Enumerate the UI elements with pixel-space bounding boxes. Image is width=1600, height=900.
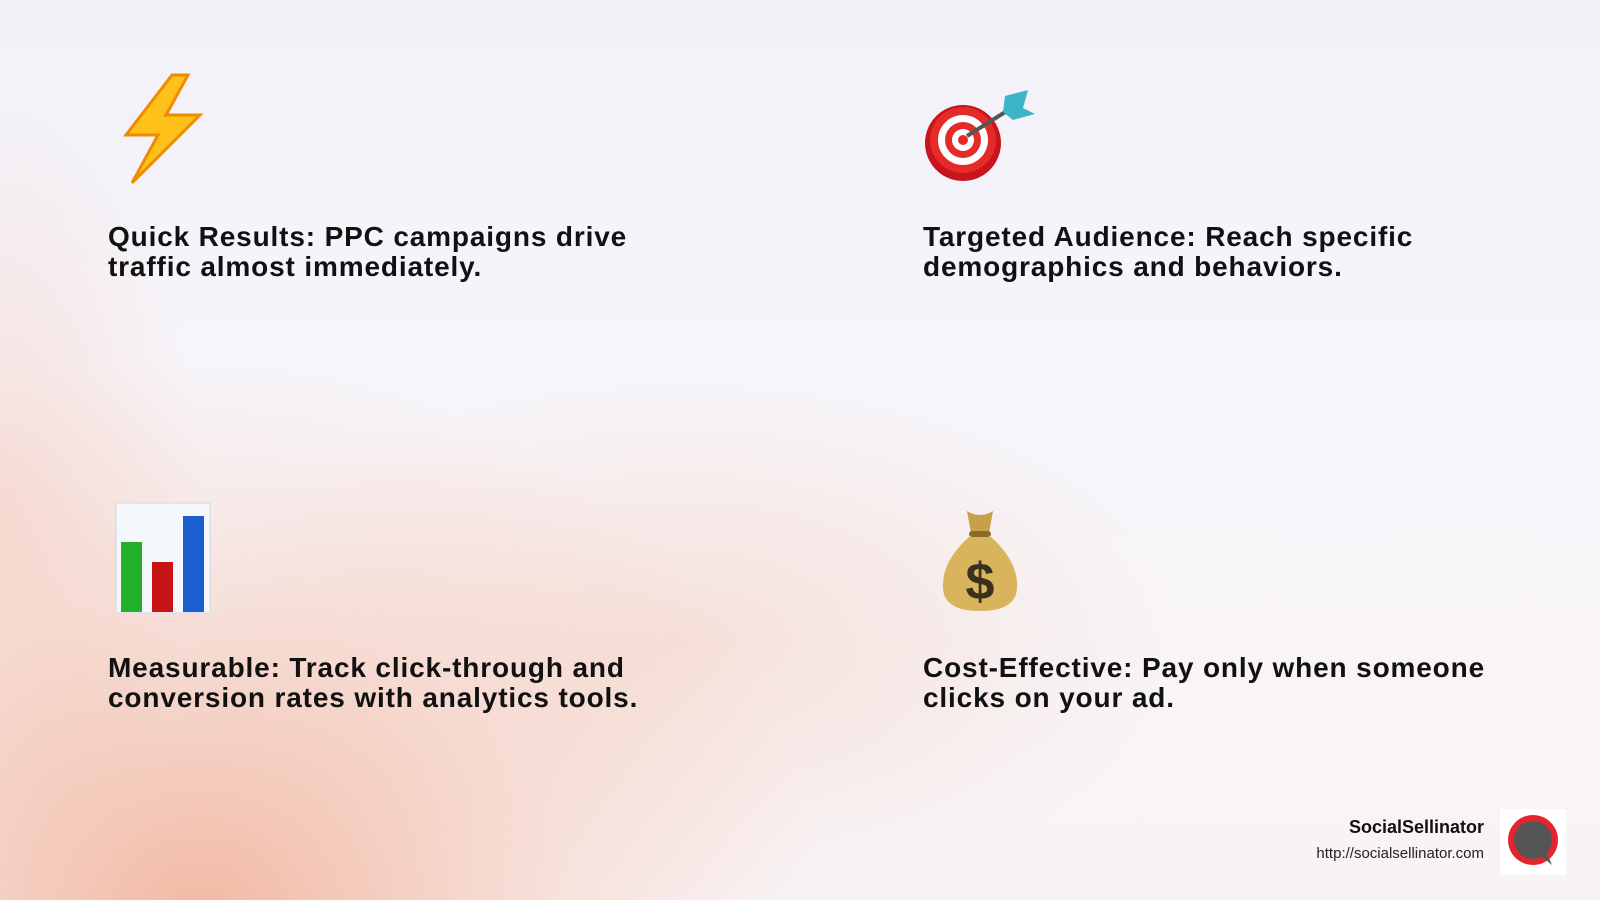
brand block — [1316, 809, 1566, 875]
text: targeted audience: demographics and behaviors. — [923, 251, 1343, 282]
text: measurable: Measurable: Track click-through and — [108, 652, 625, 683]
text: quick results — [108, 221, 627, 282]
icon: bar chart — [116, 502, 210, 614]
brand url: http://socialsellinator.com — [1316, 845, 1484, 862]
text: targeted audience — [923, 221, 1413, 282]
text: measurable: conversion rates with analytics tools. — [108, 682, 638, 713]
text: quick results: Quick Results: PPC campaigns drive — [108, 221, 627, 252]
logo — [1500, 809, 1566, 875]
icon: money bag — [942, 511, 1018, 611]
text: cost-effective — [923, 652, 1485, 713]
icon: lightning — [123, 74, 204, 184]
text: cost-effective: Cost-Effective: Pay only when someone — [923, 652, 1485, 683]
brand name: SocialSellinator — [1349, 817, 1484, 837]
icon: money bag: $ — [966, 553, 995, 611]
icon: target — [925, 90, 1035, 181]
text: measurable — [108, 652, 638, 713]
text: quick results: traffic almost immediately. — [108, 251, 482, 282]
text: cost-effective: clicks on your ad. — [923, 682, 1175, 713]
text: targeted audience: Targeted Audience: Reach specific — [923, 221, 1413, 252]
